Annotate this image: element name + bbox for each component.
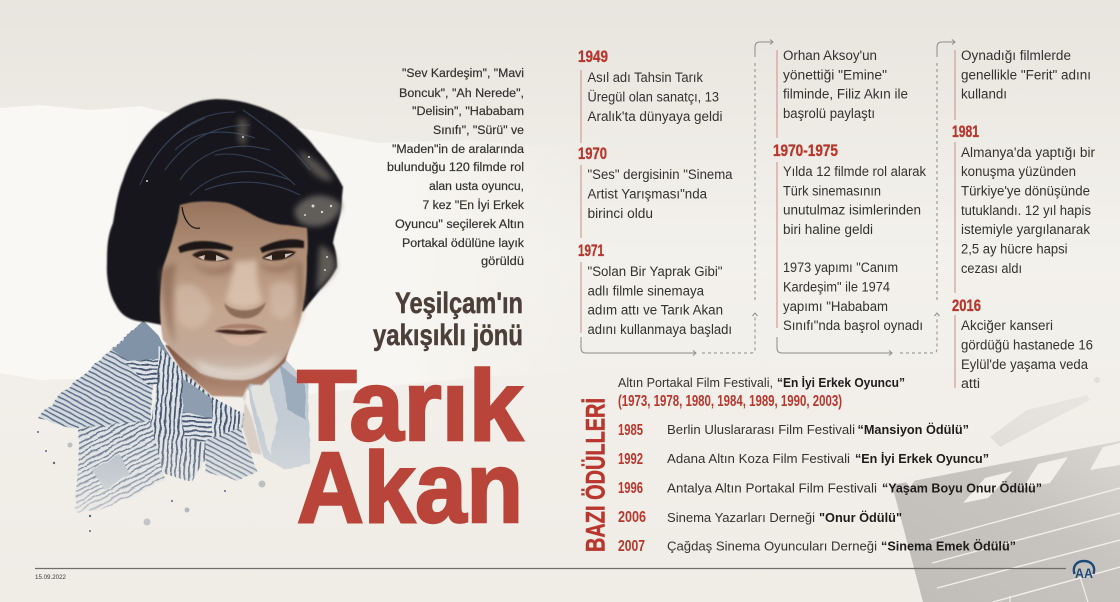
2016 entry: atti bbox=[961, 376, 980, 391]
Ferit entry: genellikle "Ferit" adını bbox=[961, 68, 1091, 82]
award: 1985: 1985 bbox=[618, 422, 643, 439]
award: 1996: 1996 bbox=[618, 480, 643, 497]
1971 entry bbox=[578, 241, 732, 337]
intro paragraph: 7 kez "En İyi Erkek bbox=[422, 199, 524, 212]
award: Altın Portakal bbox=[618, 375, 905, 410]
award: 2007 bbox=[618, 538, 1016, 555]
hair grey highlights bbox=[238, 118, 342, 292]
Ferit entry: Oynadığı filmlerde bbox=[961, 48, 1071, 63]
award: 2006: Sinema Yazarları Derneği bbox=[667, 510, 815, 525]
1981 entry: 2,5 ay hücre hapsi bbox=[961, 242, 1068, 256]
chin pale bbox=[195, 352, 280, 378]
1981 entry bbox=[952, 122, 1095, 276]
arrow: column 2 to column 3 bbox=[777, 40, 955, 356]
1970-1975 entry: Sınıfı"nda başrol oynadı bbox=[783, 318, 923, 333]
intro paragraph: görüldü bbox=[481, 256, 524, 268]
Emine entry: yönettiği "Emine" bbox=[783, 68, 887, 82]
award: 2007: “Sinema Emek Ödülü” bbox=[881, 538, 1016, 554]
timeline column 1 bbox=[578, 47, 733, 337]
2016 entry: Eylül'de yaşama veda bbox=[961, 357, 1088, 372]
1970-1975 entry: Kardeşim" ile 1974 bbox=[783, 280, 890, 294]
lower lip bbox=[222, 334, 262, 346]
red marker lines bbox=[580, 70, 582, 333]
Ferit entry bbox=[961, 48, 1091, 102]
1981 entry: cezası aldı bbox=[961, 261, 1022, 276]
award: 1996: Antalya Altın Portakal Film Festivali bbox=[667, 480, 877, 496]
portrait of Tarık Akan bbox=[37, 99, 343, 532]
Emine entry: başrolü paylaştı bbox=[783, 106, 875, 121]
1970-1975 entry: yapımı "Hababam bbox=[783, 299, 888, 314]
award: Altın Portakal: “En İyi Erkek Oyuncu” bbox=[777, 375, 905, 390]
eye whites bbox=[198, 253, 293, 261]
1971 entry: "Solan Bir Yaprak Gibi" bbox=[588, 264, 723, 279]
intro paragraph: "Maden"in de aralarında bbox=[392, 144, 525, 156]
1949 entry bbox=[578, 47, 722, 124]
1981 entry: tutuklandı. 12 yıl hapis bbox=[961, 203, 1091, 218]
Emine entry: filminde, Filiz Akın ile bbox=[783, 86, 908, 102]
eyes bbox=[192, 250, 296, 261]
1971 entry: 1971 bbox=[578, 241, 604, 260]
icon: AA logo: AA bbox=[1075, 565, 1093, 581]
hair specks bbox=[146, 136, 332, 271]
award: Altın Portakal: Altın Portakal Film Festivali, bbox=[618, 375, 773, 390]
shirt bbox=[38, 320, 310, 512]
1970 entry: birinci oldu bbox=[588, 206, 653, 221]
intro paragraph: Boncuk", "Ah Nerede", bbox=[399, 88, 524, 100]
award: 2006: "Onur Ödülü" bbox=[819, 510, 902, 525]
intro paragraph bbox=[387, 68, 525, 268]
1970 entry bbox=[578, 144, 733, 221]
intro paragraph: "Delisin", "Hababam bbox=[412, 106, 524, 118]
1949 entry: 1949 bbox=[578, 47, 608, 66]
2016 entry bbox=[952, 296, 1093, 391]
1949 entry: Üregül olan sanatçı, 13 bbox=[588, 90, 719, 104]
awards list bbox=[618, 375, 1042, 555]
intro paragraph: Oyuncu" seçilerek Altın bbox=[395, 219, 524, 231]
title: Tarık bbox=[297, 350, 523, 462]
timeline column 3 bbox=[952, 48, 1095, 391]
mouth bbox=[214, 330, 268, 334]
Emine entry: Orhan Aksoy'un bbox=[783, 48, 877, 63]
1970 entry: 1970 bbox=[578, 144, 607, 163]
arrow: column 1 to column 2 bbox=[581, 40, 773, 356]
nose shadow bbox=[224, 302, 266, 318]
date: 15.09.2022 bbox=[35, 574, 66, 581]
timeline column 2 bbox=[773, 48, 926, 333]
title: Akan bbox=[297, 432, 523, 544]
1970-1975 entry: 1973 yapımı "Canım bbox=[783, 260, 898, 275]
award: 1992 bbox=[618, 451, 989, 468]
award: 2007: 2007 bbox=[618, 538, 645, 555]
red marker lines bbox=[776, 50, 778, 328]
title bbox=[297, 350, 523, 544]
award: 1985: “Mansiyon Ödülü” bbox=[858, 422, 969, 437]
intro paragraph: Sınıfı", "Sürü" ve bbox=[433, 125, 524, 137]
cheek highlight bbox=[175, 282, 296, 329]
under-eye shadow bbox=[192, 258, 296, 275]
face bbox=[160, 201, 308, 380]
1970-1975 entry: biri haline geldi bbox=[783, 222, 873, 237]
clapperboard background bbox=[892, 377, 1120, 602]
1970-1975 entry: unutulmaz isimlerinden bbox=[783, 202, 921, 218]
award: 2007: Çağdaş Sinema Oyuncuları Derneği bbox=[667, 538, 877, 554]
intro paragraph: Portakal ödülüne layık bbox=[402, 238, 524, 250]
subtitle bbox=[373, 287, 523, 352]
1981 entry: Türkiye'ye dönüşünde bbox=[961, 184, 1090, 198]
fringe curl bbox=[182, 207, 200, 228]
1981 entry: konuşma yüzünden bbox=[961, 164, 1076, 179]
1970 entry: "Ses" dergisinin "Sinema bbox=[588, 167, 733, 182]
footer rule bbox=[35, 568, 1066, 570]
upper lip bbox=[216, 324, 266, 330]
1981 entry: 1981 bbox=[952, 122, 979, 141]
intro paragraph: bulunduğu 120 filmde rol bbox=[387, 162, 524, 174]
award: 2006: 2006 bbox=[618, 509, 646, 526]
hair bbox=[107, 99, 343, 325]
1949 entry: Asıl adı Tahsin Tarık bbox=[588, 70, 703, 85]
1971 entry: adlı filmle sinemaya bbox=[588, 284, 704, 298]
2016 entry: 2016 bbox=[952, 296, 981, 315]
award: 1996 bbox=[618, 480, 1042, 497]
Emine entry bbox=[783, 48, 908, 121]
1970-1975 entry: Türk sinemasının bbox=[783, 184, 881, 198]
award: 1992: “En İyi Erkek Oyuncu” bbox=[855, 451, 989, 466]
shirt specks bbox=[37, 431, 266, 532]
award: 1985: Berlin Uluslararası Film Festivali bbox=[667, 422, 855, 437]
nose highlight bbox=[226, 260, 262, 308]
1970 entry: Artist Yarışması"nda bbox=[588, 186, 707, 202]
awards heading: BAZI ÖDÜLLERİ bbox=[580, 398, 610, 552]
2016 entry: Akciğer kanseri bbox=[961, 318, 1053, 333]
intro paragraph: alan usta oyuncu, bbox=[429, 181, 524, 193]
red marker lines bbox=[954, 50, 956, 388]
1981 entry: istemiyle yargılanarak bbox=[961, 222, 1090, 237]
award: 1996: “Yaşam Boyu Onur Ödülü” bbox=[882, 480, 1042, 496]
2016 entry: gördüğü hastanede 16 bbox=[961, 338, 1093, 352]
neck bbox=[165, 345, 290, 397]
face shadow bbox=[160, 262, 305, 345]
award: 1992: Adana Altın Koza Film Festivali bbox=[667, 451, 850, 466]
1981 entry: Almanya'da yaptığı bir bbox=[961, 145, 1095, 160]
intro paragraph: "Sev Kardeşim", "Mavi bbox=[402, 68, 524, 80]
Ferit entry: kullandı bbox=[961, 86, 1007, 102]
1970-1975 entry bbox=[773, 141, 926, 333]
1971 entry: adını kullanmaya başladı bbox=[588, 322, 732, 337]
1949 entry: Aralık'ta dünyaya geldi bbox=[588, 109, 722, 124]
eyebrows bbox=[178, 239, 304, 253]
1970-1975 entry: 1970-1975 bbox=[773, 141, 838, 160]
1970-1975 entry: Yılda 12 filmde rol alarak bbox=[783, 164, 926, 179]
award: 2006 bbox=[618, 509, 902, 526]
subtitle: yakışıklı jönü bbox=[373, 319, 523, 352]
award: 1985 bbox=[618, 422, 969, 439]
award: 1992: 1992 bbox=[618, 451, 643, 468]
award: Altın Portakal: (1973, 1978, 1980, 1984, 1989, 1990, 2003) bbox=[618, 393, 842, 410]
subtitle: Yeşilçam'ın bbox=[395, 287, 523, 320]
1971 entry: adım attı ve Tarık Akan bbox=[588, 302, 723, 318]
hair sheen bbox=[140, 110, 310, 195]
